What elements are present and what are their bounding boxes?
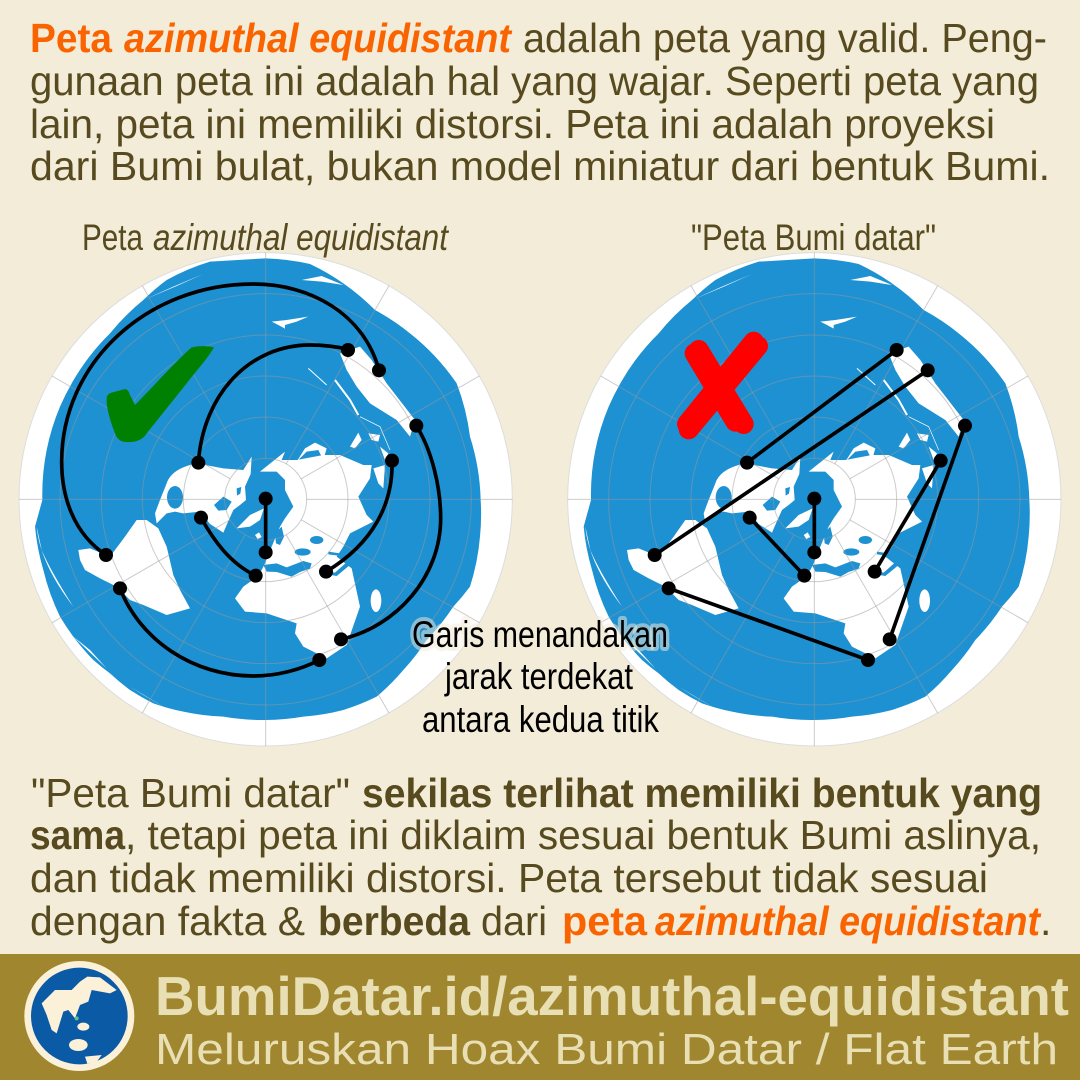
straight lines between points <box>655 350 965 660</box>
intro paragraph: adalah peta yang valid. Peng- <box>523 15 1047 61</box>
left map title: Peta <box>82 217 143 258</box>
lower paragraph: sama <box>30 812 126 858</box>
lower paragraph <box>30 770 1051 944</box>
lower paragraph: dari <box>481 898 547 944</box>
callout: line meaning <box>412 614 668 740</box>
callout: line meaning: antara kedua titik <box>422 699 659 740</box>
panel: azimuthal equidistant map with curved lines <box>19 253 512 746</box>
curved shortest-distance lines <box>62 284 441 676</box>
lower paragraph: . <box>1040 898 1051 944</box>
highlighted closing term: azimuthal equidistant <box>655 898 1042 944</box>
black location dots <box>99 343 423 667</box>
callout: line meaning: Garis menandakan <box>412 614 668 655</box>
intro paragraph: lain, peta ini memiliki distorsi. Peta ini adalah proyeksi <box>30 101 995 147</box>
lower paragraph: berbeda <box>318 898 471 944</box>
callout: line meaning: jarak terdekat <box>444 656 634 697</box>
lower paragraph: dan tidak memiliki distorsi. Peta tersebut tidak sesuai <box>30 855 988 901</box>
highlighted term: azimuthal equidistant <box>124 15 513 61</box>
right map title: "Peta Bumi datar" <box>691 217 936 258</box>
intro paragraph: dari Bumi bulat, bukan model miniatur dari bentuk Bumi. <box>30 143 1050 189</box>
highlighted closing term: peta <box>562 898 648 944</box>
black location dots <box>648 343 972 667</box>
icon: green check mark <box>107 346 214 442</box>
panel: flat earth map with straight lines <box>568 253 1061 746</box>
lower paragraph: sekilas terlihat memiliki bentuk yang <box>362 770 1042 816</box>
icon: globe logo <box>24 961 134 1071</box>
tagline: Meluruskan Hoax Bumi Datar / Flat Earth <box>155 1025 1058 1074</box>
icon: red cross mark <box>687 342 758 429</box>
left map title: azimuthal equidistant <box>153 217 449 258</box>
footer band <box>0 954 1080 1080</box>
lower paragraph: dengan fakta & <box>30 898 305 944</box>
website address: BumiDatar.id/azimuthal-equidistant <box>155 965 1069 1027</box>
lower paragraph: "Peta Bumi datar" <box>31 770 350 816</box>
lower paragraph: , tetapi peta ini diklaim sesuai bentuk Bumi aslinya, <box>125 812 1041 858</box>
intro paragraph <box>30 15 1050 189</box>
highlighted term: Peta <box>30 15 113 61</box>
intro paragraph: gunaan peta ini adalah hal yang wajar. Seperti peta yang <box>30 58 1039 104</box>
